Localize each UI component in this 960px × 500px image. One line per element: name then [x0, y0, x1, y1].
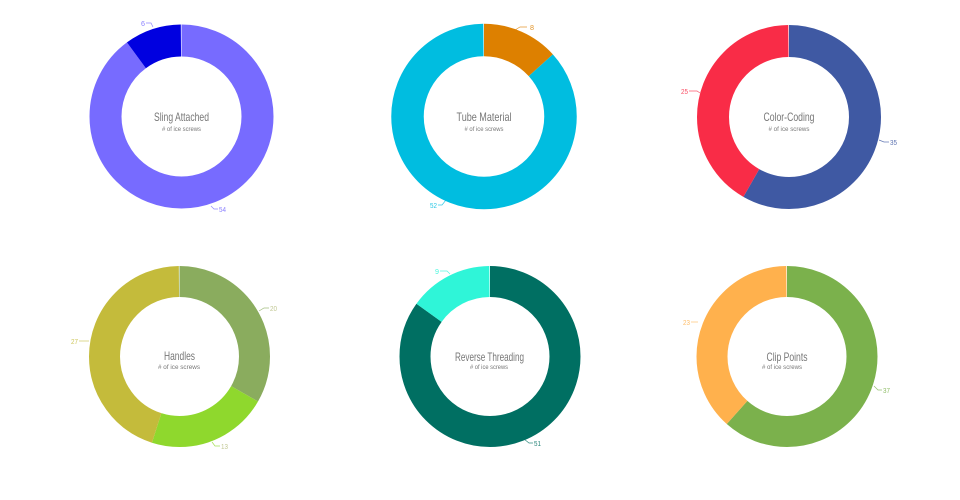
donut panel: Reverse Threading: [415, 267, 565, 448]
label: 23: [683, 318, 698, 327]
label: 25: 25: [681, 87, 688, 96]
subtitle: # of ice screws: [768, 127, 810, 133]
heading: Clip Points: Clip Points: [766, 350, 808, 364]
heading: Color-Coding: Color-Coding: [764, 110, 814, 124]
label: 35: [879, 138, 897, 147]
donut chart: Sling Attached: [106, 40, 258, 192]
label: 6: [141, 19, 153, 28]
heading: Reverse Threading: Reverse Threading: [455, 350, 524, 364]
label: 52: 52: [430, 201, 437, 210]
subtitle: # of ice screws: [464, 127, 504, 133]
label: 27: 27: [71, 337, 78, 346]
label: 20: [259, 304, 277, 313]
label: 54: 54: [219, 205, 226, 214]
label: 35: 35: [890, 138, 897, 147]
subtitle: # of ice screws: [470, 365, 508, 371]
label: 8: [515, 23, 534, 32]
label: 6: 6: [141, 19, 145, 28]
donut chart: Clip Points: [712, 282, 862, 432]
donut chart: Handles: [104, 282, 254, 432]
donut panel: Color-Coding: [681, 41, 897, 193]
heading: Sling Attached: Sling Attached: [154, 110, 209, 124]
label: 52: [430, 200, 446, 210]
label: 23: 23: [683, 318, 690, 327]
subtitle: # of ice screws: [162, 127, 201, 133]
donut panel: Tube Material: [408, 23, 560, 210]
label: 8: 8: [530, 23, 534, 32]
donut chart: Color-Coding: [713, 41, 865, 193]
label: 37: [874, 386, 890, 395]
heading: Tube Material: Tube Material: [456, 110, 512, 124]
heading: Handles: Handles: [164, 349, 195, 363]
donut chart: Reverse Threading: [415, 282, 565, 432]
label: 51: [524, 439, 541, 448]
label: 13: 13: [221, 442, 228, 451]
label: 51: 51: [534, 439, 541, 448]
label: 9: 9: [435, 267, 439, 276]
donut chart: Tube Material: [408, 40, 560, 193]
label: 9: [435, 267, 450, 276]
donut panel: Sling Attached: [106, 19, 258, 214]
donut panel: Clip Points: [683, 282, 890, 432]
donut panel: Handles: [71, 282, 277, 451]
label: 37: 37: [883, 386, 890, 395]
label: 20: 20: [270, 304, 277, 313]
label: 27: [71, 337, 89, 346]
subtitle: # of ice screws: [762, 365, 802, 371]
subtitle: # of ice screws: [158, 365, 200, 371]
label: 25: [681, 87, 700, 96]
label: 13: [212, 442, 228, 451]
label: 54: [211, 205, 226, 214]
